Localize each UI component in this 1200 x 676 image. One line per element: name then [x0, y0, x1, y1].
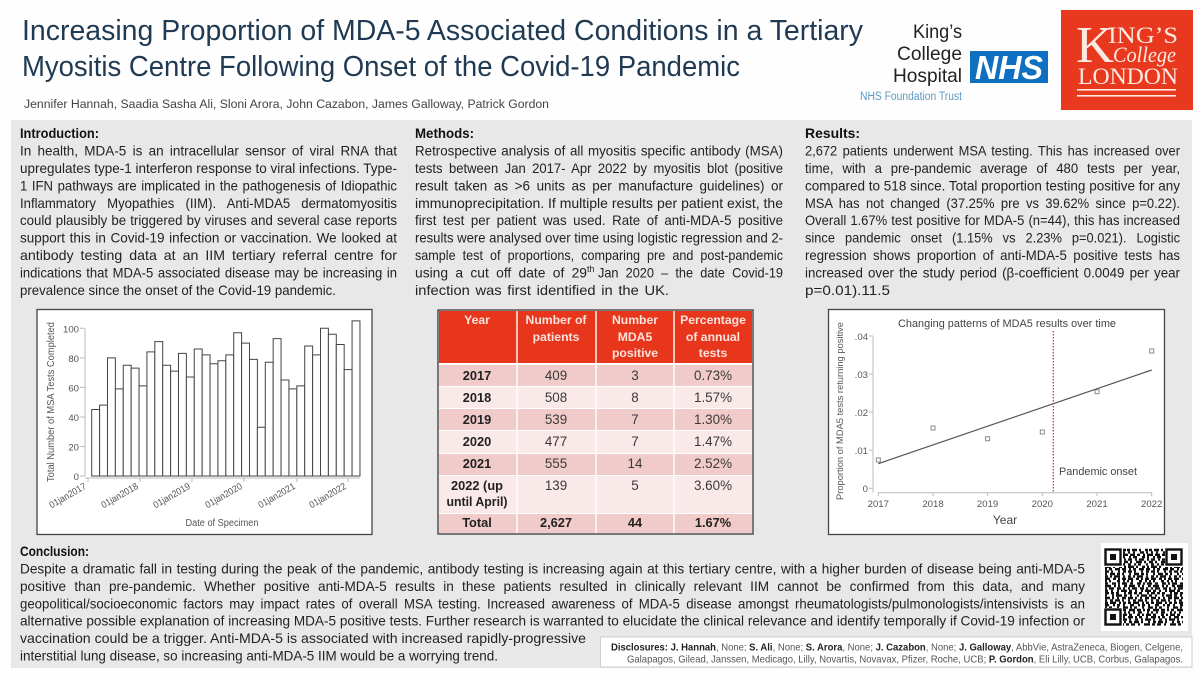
- x axis title: Year: [993, 513, 1017, 527]
- table rows: until April): [446, 494, 508, 509]
- table rows: 2.52%: [694, 456, 732, 471]
- table rows: 5: [631, 478, 639, 493]
- table rows: 14: [628, 456, 643, 471]
- table rows: 139: [545, 478, 567, 493]
- text block: introduction body: Inflammatory Myopathies (IIM). Anti-MDA5 dermatomyositis: [20, 195, 397, 211]
- logo: King's College London: LONDON: [1078, 64, 1178, 89]
- logo: King's College Hospital NHS: King’s: [913, 21, 962, 43]
- logo: King's College London: K: [1076, 17, 1114, 74]
- text block: results body: time, with a pre-pandemic average of 480 tests per year,: [805, 160, 1180, 176]
- x tick labels: [868, 499, 1162, 510]
- x axis labels: 01jan2021: [256, 481, 298, 511]
- text block: results body: p=0.01).11.5: [805, 282, 890, 298]
- pandemic onset line: [1052, 331, 1054, 493]
- x tick labels: 2022: [1141, 499, 1162, 510]
- x tick labels: 2019: [977, 499, 998, 510]
- text block: results body: increased over the study period (β-coefficient 0.0049 per year: [805, 264, 1180, 280]
- pandemic onset label: Pandemic onset: [1059, 466, 1137, 478]
- x tick labels: 2018: [922, 499, 944, 510]
- y axis title: Total Number of MSA Tests Completed: [46, 322, 57, 482]
- text block: methods body: immunoprecipitation. If multiple results per patient exist, the: [415, 195, 783, 211]
- logo: King's College Hospital NHS: Hospital: [893, 65, 962, 87]
- table rows: 3.60%: [694, 478, 732, 493]
- table header: of annual: [686, 330, 740, 344]
- text block: methods body: results were analysed over time using logistic regression and 2-: [415, 230, 783, 246]
- y axis title: Proportion of MDA5 tests returning positive: [835, 322, 846, 500]
- table rows: 2018: [463, 390, 491, 405]
- table rows: 7: [631, 434, 639, 449]
- text block: introduction body: support this in Covid-19 infection or vaccination. We looked at: [20, 230, 397, 246]
- header: title: [22, 15, 864, 83]
- table rows: 2022 (up: [451, 478, 503, 493]
- text block: methods body: result taken as >6 units as per manufacture guidelines) or: [415, 177, 783, 193]
- y axis labels: [63, 324, 79, 483]
- y tick labels: .04: [855, 332, 869, 343]
- y axis labels: 40: [68, 413, 79, 424]
- trend line: [878, 370, 1152, 464]
- text block: conclusion body: interstitial lung disease, so increasing anti-MDA-5 IIM would be a worrying trend.: [20, 648, 498, 664]
- text block: conclusion body: geopolitical/socioeconomic factors may impact rates of overall MSA testing. Increased awareness of MDA-5 disease amongst rheumatologists/pulmonologists/intensivists is an: [20, 595, 1085, 611]
- x axis labels: 01jan2019: [151, 481, 192, 511]
- table header: patients: [533, 330, 580, 344]
- text block: methods body: th: [587, 264, 595, 274]
- logo: King's College London: ING’S: [1108, 23, 1178, 48]
- text block: results body: MSA has not changed (37.25% pre vs 39.62% since p=0.22).: [805, 195, 1180, 211]
- text block: introduction body: upregulates type-1 interferon response to viral infections. Type-: [20, 160, 397, 176]
- text block: introduction body: indications that MDA-5 associated disease may be increasing in: [20, 264, 397, 280]
- text block: methods body: Retrospective analysis of all myositis specific antibody (MSA): [415, 142, 783, 158]
- table rows: Total: [462, 515, 492, 530]
- text block: introduction body: prevalence since the onset of the Covid-19 pandemic.: [20, 282, 336, 298]
- logo: King's College Hospital NHS: College: [897, 43, 962, 65]
- table rows: 2020: [463, 434, 491, 449]
- table rows: 44: [628, 515, 643, 530]
- axes: [869, 336, 1152, 496]
- table rows: 7: [631, 412, 639, 427]
- text block: introduction body: 1 IFN pathways are implicated in the pathogenesis of Idiopathic: [20, 177, 397, 193]
- text block: methods body: tests between Jan 2017- Apr 2022 by myositis blot (positive: [415, 160, 783, 176]
- text block: conclusion body: vaccination could be a trigger. Anti-MDA-5 is associated with increased rapidly-progressive: [20, 630, 586, 646]
- heading: conclusion: Conclusion:: [20, 543, 89, 559]
- text block: methods body: infection was first identified in the UK.: [415, 282, 669, 298]
- y axis labels: 80: [68, 354, 79, 365]
- table header: Number: [612, 313, 658, 327]
- heading: introduction: Introduction:: [20, 125, 99, 141]
- x tick labels: 2017: [868, 499, 889, 510]
- table header: Year: [464, 313, 490, 327]
- text block: conclusion body: Despite a dramatic fall in testing during the peak of the pandemic, antibody testing is increasing again at this tertiary centre, with a higher burden of disease being anti-MDA-5: [20, 560, 1085, 576]
- text block: results body: compared to 518 since. Total proportion testing positive for any: [805, 177, 1180, 193]
- table header: Number of: [526, 313, 587, 327]
- panel: introduction: [20, 125, 397, 298]
- text block: conclusion body: alternative possible explanation of increasing MDA-5 positive tests. Further research is warranted to elucidate the clinical relevance and identify temporally if Covid-19 infection or: [20, 613, 1085, 629]
- heading: results: Results:: [805, 125, 860, 141]
- y axis labels: 0: [74, 472, 79, 483]
- table rows: 2019: [463, 412, 491, 427]
- x axis labels: 01jan2017: [47, 481, 88, 511]
- x axis labels: 01jan2020: [203, 481, 244, 511]
- table rows: 1.57%: [694, 390, 732, 405]
- y axis labels: 60: [68, 383, 79, 394]
- table rows: 3: [631, 368, 639, 383]
- QR code: [1101, 543, 1188, 631]
- text block: introduction body: In health, MDA-5 is an intracellular sensor of viral RNA that: [20, 142, 397, 158]
- x tick labels: 2021: [1086, 499, 1108, 510]
- x axis labels: [47, 481, 349, 511]
- table rows: 1.30%: [694, 412, 732, 427]
- y tick labels: .01: [855, 446, 868, 457]
- panel: results: [805, 125, 1180, 298]
- table rows: 539: [545, 412, 567, 427]
- logo: King's College Hospital NHS: NHS Foundation Trust: [860, 91, 963, 103]
- disclosures box: [600, 637, 1192, 667]
- table rows: 555: [545, 456, 567, 471]
- text block: conclusion body: positive than pre-pandemic. Whether positive anti-MDA-5 results in these patients resulted in clinically relevant IIM cannot be confirmed from this data, and many: [20, 578, 1085, 594]
- disclosures box: Disclosures: J. Hannah, None; S. Ali, None; S. Arora, None; J. Cazabon, None; J. Galloway, AbbVie, AstraZeneca, Biogen, Celgene,: [611, 642, 1183, 654]
- table rows: 1.47%: [694, 434, 732, 449]
- table rows: 508: [545, 390, 567, 405]
- table header: tests: [699, 346, 727, 360]
- text block: methods body: using a cut off date of 29: [415, 264, 587, 280]
- panel: methods: [415, 125, 783, 298]
- table header: MDA5: [618, 330, 652, 344]
- text block: methods body: [415, 142, 783, 298]
- logo: King's College London: College: [1113, 42, 1176, 67]
- table rows: 0.73%: [694, 368, 732, 383]
- logo: King's College Hospital NHS: NHS: [975, 49, 1043, 86]
- table rows: 477: [545, 434, 567, 449]
- table rows: [446, 368, 732, 530]
- text block: results body: regression shows proportion of anti-MDA-5 positive tests has: [805, 247, 1180, 263]
- heading: methods: Methods:: [415, 125, 474, 141]
- header: title: Increasing Proportion of MDA-5 Associated Conditions in a Tertiary: [22, 15, 864, 47]
- table header: positive: [612, 346, 658, 360]
- data points: [876, 349, 1154, 462]
- y tick labels: .03: [855, 370, 868, 381]
- y tick labels: 0: [863, 484, 868, 495]
- text block: results body: [805, 142, 1180, 298]
- y tick labels: [855, 332, 869, 495]
- disclosures box: Galapagos, Gilead, Janssen, Medicago, Lilly, Novartis, Novavax, Pfizer, Roche, UCB; P. Gordon, Eli Lilly, UCB, Corbus, Galapagos.: [627, 654, 1183, 666]
- x axis labels: 01jan2022: [307, 481, 348, 511]
- x axis labels: 01jan2018: [99, 481, 140, 511]
- text block: results body: Overall 1.67% test positive for MDA-5 (n=44), this has increased: [805, 212, 1180, 228]
- chart title: Changing patterns of MDA5 results over time: [898, 318, 1116, 330]
- table rows: 8: [631, 390, 639, 405]
- table header: [464, 313, 746, 360]
- text block: introduction body: could plausibly be triggered by viruses and several case reports: [20, 212, 397, 228]
- scatter chart: changing patterns of MDA5 results: [828, 310, 1164, 534]
- table rows: 1.67%: [695, 515, 732, 530]
- text block: methods body: Jan 2020 – the date Covid-19: [598, 264, 783, 280]
- y axis labels: 20: [68, 442, 79, 454]
- table rows: 2017: [463, 368, 491, 383]
- text block: conclusion body: [20, 560, 1085, 664]
- table rows: 2021: [463, 456, 491, 471]
- text block: introduction body: [20, 142, 397, 298]
- x axis title: Date of Specimen: [186, 518, 258, 529]
- logo: King's College London: [1061, 10, 1193, 110]
- text block: introduction body: antibody testing data at an IIM tertiary referral centre for: [20, 247, 397, 263]
- bar chart: MSA tests completed over time: [37, 310, 372, 534]
- authors: Jennifer Hannah, Saadia Sasha Ali, Sloni Arora, John Cazabon, James Galloway, Patrick Gordon: [24, 97, 549, 111]
- main grey panel: [11, 120, 1192, 668]
- table rows: 2,627: [540, 515, 572, 530]
- header: title: Myositis Centre Following Onset of the Covid-19 Pandemic: [22, 51, 740, 83]
- table header: Percentage: [680, 313, 746, 327]
- text block: methods body: sample test of proportions, comparing pre and post-pandemic: [415, 247, 783, 263]
- table rows: 409: [545, 368, 567, 383]
- logo: King's College Hospital NHS: [860, 21, 1048, 103]
- text block: methods body: first test per patient was used. Rate of anti-MDA-5 positive: [415, 212, 783, 228]
- axes: [80, 328, 360, 482]
- table: MDA5 results by year: [438, 310, 753, 534]
- bars: [92, 321, 360, 476]
- y tick labels: .02: [855, 408, 868, 419]
- y axis labels: 100: [63, 324, 79, 335]
- x tick labels: 2020: [1032, 499, 1053, 510]
- panel: conclusion: [20, 543, 1085, 664]
